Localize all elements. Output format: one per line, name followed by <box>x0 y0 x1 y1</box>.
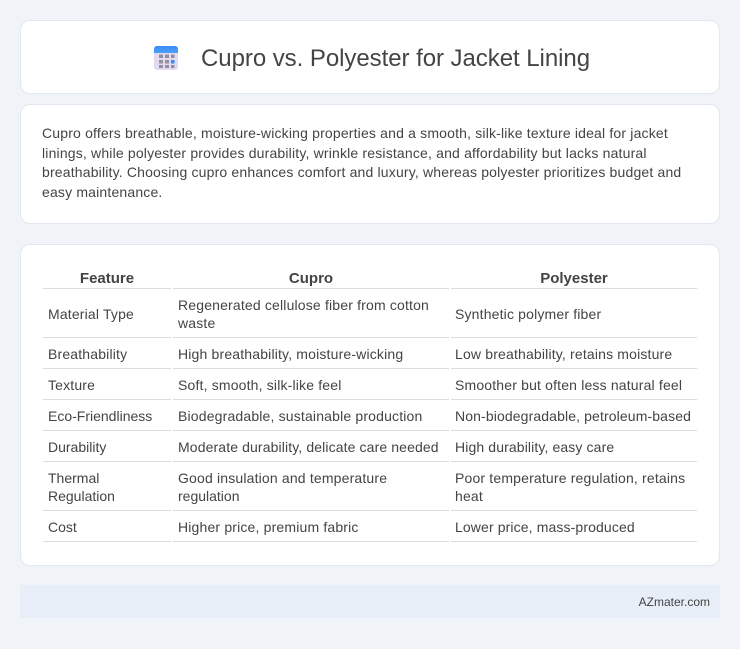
comparison table: Texture <box>48 377 95 393</box>
comparison table: Smoother but often less natural feel <box>455 377 682 393</box>
comparison table: Synthetic polymer fiber <box>455 306 601 322</box>
comparison table: Regulation <box>48 488 115 504</box>
comparison table: regulation <box>178 488 240 504</box>
summary text: breathability. Choosing cupro enhances comfort and luxury, whereas polyester prioritizes budget and <box>42 164 681 180</box>
comparison table: High breathability, moisture-wicking <box>178 346 403 362</box>
comparison table: Non-biodegradable, petroleum-based <box>455 408 691 424</box>
comparison table: Biodegradable, sustainable production <box>178 408 422 424</box>
comparison table: Low breathability, retains moisture <box>455 346 672 362</box>
panel: comparison table <box>20 244 720 566</box>
panel: header <box>20 20 720 94</box>
comparison table: Feature <box>80 270 134 287</box>
comparison table: High durability, easy care <box>455 439 614 455</box>
comparison table: Breathability <box>48 346 127 362</box>
comparison table: heat <box>455 488 483 504</box>
summary text <box>42 125 681 200</box>
comparison table: Lower price, mass-produced <box>455 519 635 535</box>
footer bar <box>20 585 720 618</box>
comparison table: Poor temperature regulation, retains <box>455 470 685 486</box>
summary text: Cupro offers breathable, moisture-wicking properties and a smooth, silk-like texture ideal for jacket <box>42 125 668 141</box>
comparison table: Eco-Friendliness <box>48 408 152 424</box>
comparison table: Cost <box>48 519 77 535</box>
comparison table: Thermal <box>48 470 99 486</box>
comparison table: Durability <box>48 439 106 455</box>
comparison table: Cupro <box>289 270 333 287</box>
panel: summary <box>20 104 720 224</box>
summary text: linings, while polyester provides durability, wrinkle resistance, and affordability but lacks natural <box>42 144 647 160</box>
icon: calendar <box>154 46 178 70</box>
comparison table: Higher price, premium fabric <box>178 519 359 535</box>
comparison table: Polyester <box>540 270 608 287</box>
summary text: easy maintenance. <box>42 184 162 200</box>
comparison table: waste <box>178 315 215 331</box>
footer credit: AZmater.com <box>639 595 710 609</box>
comparison table: Soft, smooth, silk-like feel <box>178 377 341 393</box>
comparison table: Material Type <box>48 306 134 322</box>
comparison table: Regenerated cellulose fiber from cotton <box>178 297 429 313</box>
comparison table: Moderate durability, delicate care needed <box>178 439 439 455</box>
title: Cupro vs. Polyester for Jacket Lining <box>201 45 590 72</box>
comparison table <box>43 270 697 542</box>
comparison table: Good insulation and temperature <box>178 470 387 486</box>
